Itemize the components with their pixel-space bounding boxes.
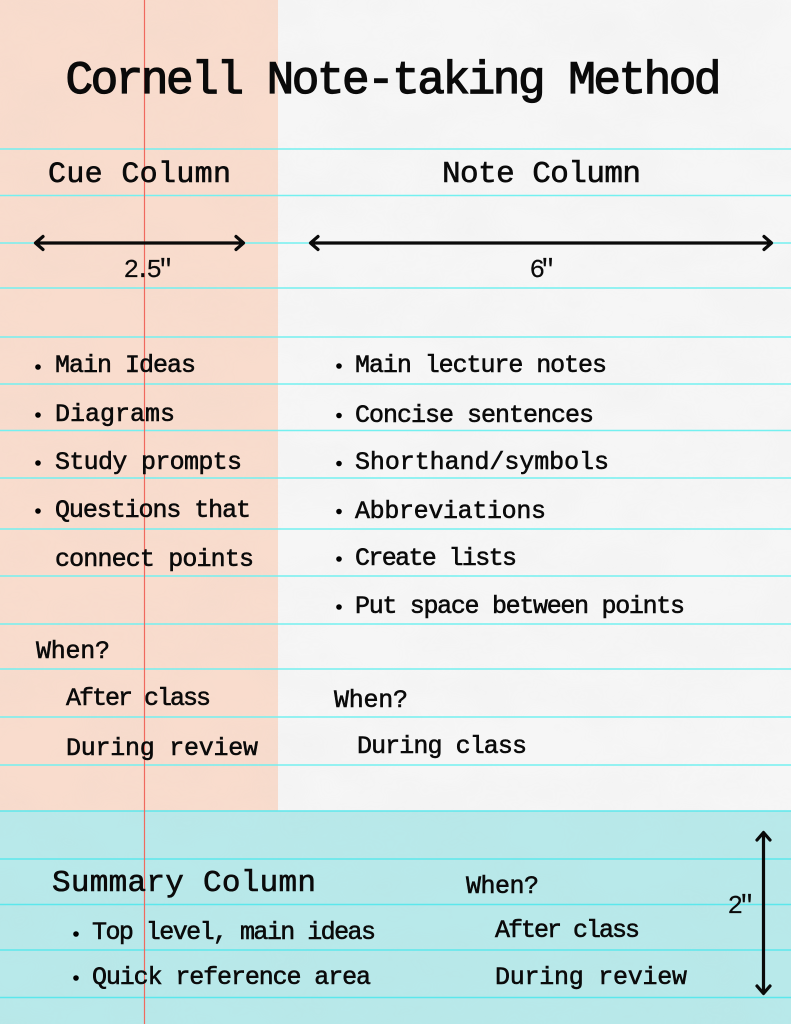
title: Cornell Note-taking Method	[66, 55, 722, 107]
cue bullet list: Main Ideas	[55, 351, 196, 380]
cue bullet list	[35, 351, 254, 574]
summary bullet list: Quick reference area	[92, 963, 371, 992]
summary bullet list	[73, 918, 376, 992]
arrow: cue column width	[36, 236, 244, 250]
heading: summary column: Summary Column	[52, 866, 316, 901]
summary bullet list: Top level, main ideas	[92, 918, 376, 947]
note bullet list: Create lists	[355, 544, 517, 573]
panel: summary column background	[0, 811, 791, 1024]
cue bullet list: Questions that	[55, 496, 251, 525]
panel: cue column background	[0, 0, 278, 811]
summary timing: After class	[495, 916, 640, 945]
summary timing: When?	[466, 872, 539, 901]
note bullet list	[336, 351, 685, 621]
note bullet list: Put space between points	[355, 592, 685, 621]
cue timing: After class	[66, 684, 211, 713]
summary height label: 2"	[728, 891, 754, 921]
panel: note column	[310, 157, 772, 761]
note bullet list: Abbreviations	[355, 497, 546, 526]
cue timing: During review	[66, 734, 258, 763]
cue width label: 2.5"	[124, 255, 174, 285]
cue timing: When?	[36, 637, 110, 666]
cue bullet list: Study prompts	[55, 448, 242, 477]
note width label: 6"	[530, 255, 556, 285]
panel: cue column	[35, 158, 258, 763]
heading: note column: Note Column	[442, 157, 641, 192]
note timing	[334, 686, 527, 761]
note timing: When?	[334, 686, 408, 715]
cue timing	[36, 637, 258, 763]
note bullet list: Shorthand/symbols	[355, 448, 609, 477]
cue bullet list: connect points	[55, 545, 254, 574]
note bullet list: Concise sentences	[355, 401, 594, 430]
summary timing: During review	[495, 963, 687, 992]
cue bullet list: Diagrams	[55, 400, 175, 429]
panel: summary column	[52, 832, 770, 994]
heading: cue column: Cue Column	[48, 158, 231, 192]
summary timing	[466, 872, 687, 992]
note timing: During class	[357, 732, 527, 761]
arrow: note column width	[310, 236, 772, 250]
arrow: summary height	[757, 832, 770, 994]
note bullet list: Main lecture notes	[355, 351, 607, 380]
